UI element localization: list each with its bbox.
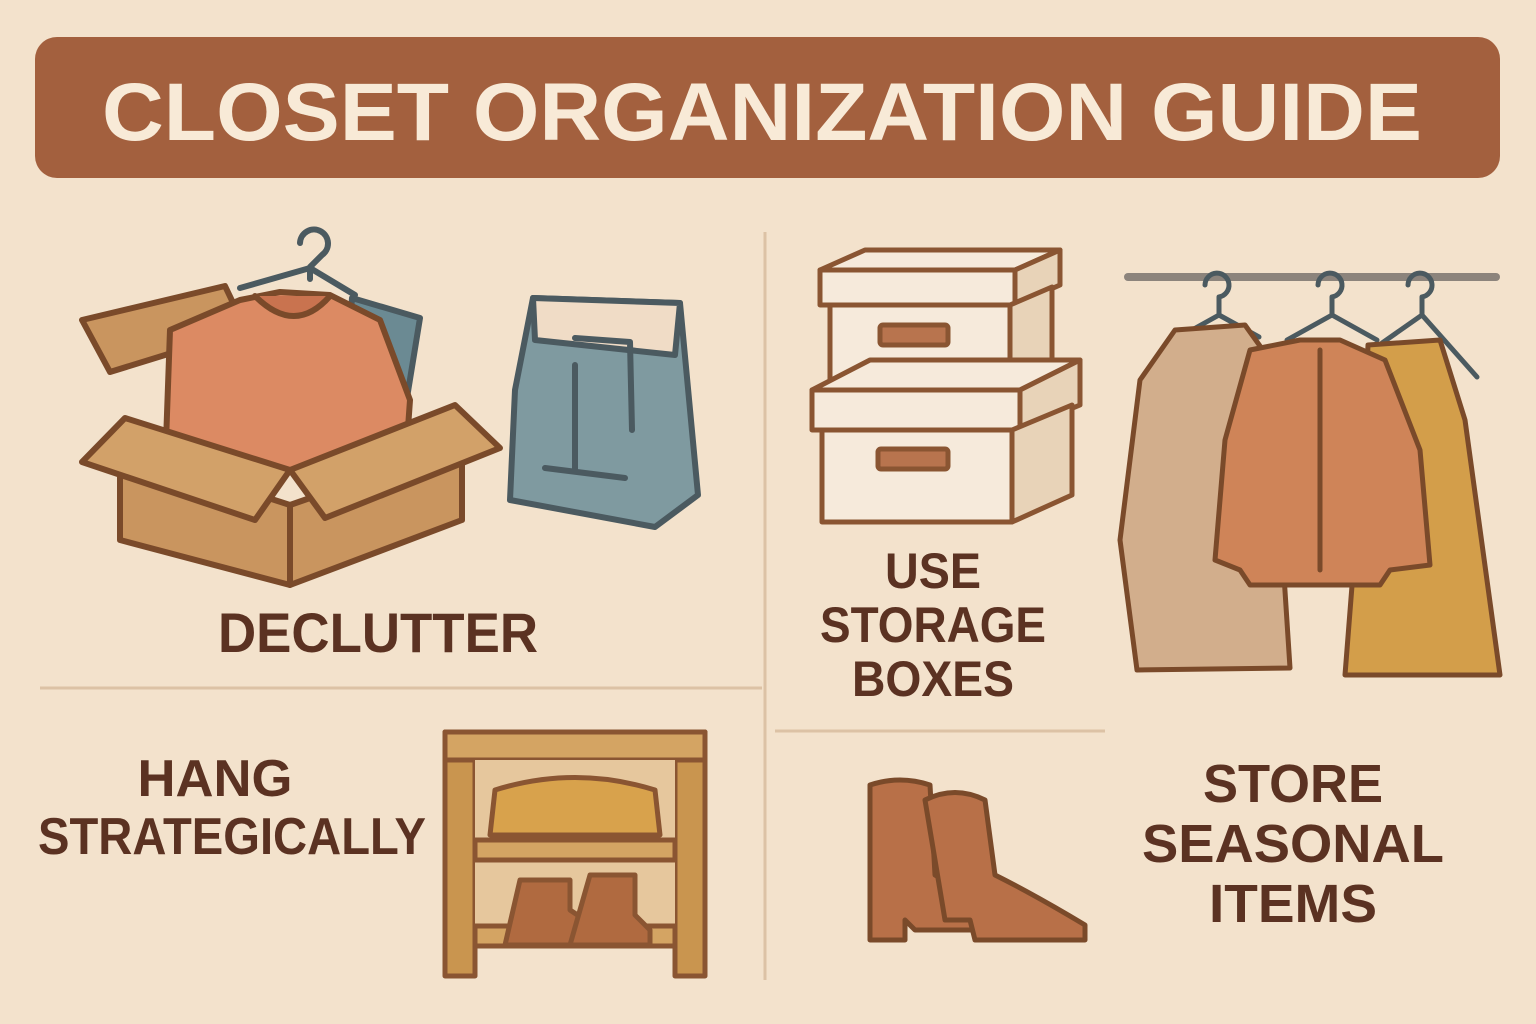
label: hang strategically: STRATEGICALLY (38, 808, 426, 866)
label: use storage boxes: BOXES (852, 651, 1014, 707)
panel: declutter (82, 230, 698, 664)
panel: store seasonal items (870, 754, 1444, 940)
label: use storage boxes (820, 543, 1046, 707)
panel: seasonal clothes on rail (1120, 273, 1500, 675)
icon: shelf with sweater and boots (445, 732, 705, 976)
icon: box with clothes (82, 230, 500, 585)
title: CLOSET ORGANIZATION GUIDE (102, 67, 1422, 158)
icon: coat (1120, 325, 1290, 670)
label: store seasonal items: ITEMS (1209, 874, 1377, 934)
label: store seasonal items (1142, 754, 1444, 934)
icon: dress (1345, 340, 1500, 675)
label: store seasonal items: STORE (1203, 754, 1383, 814)
title (35, 37, 1500, 178)
label: store seasonal items: SEASONAL (1142, 814, 1444, 874)
icon: jacket (1215, 340, 1430, 585)
label: hang strategically: HANG (138, 750, 292, 808)
icon: ankle boots (870, 780, 1085, 940)
label: declutter: DECLUTTER (218, 601, 538, 664)
label: hang strategically (38, 750, 426, 866)
icon: folded jeans (510, 298, 698, 527)
panel: hang strategically (38, 732, 705, 976)
panel: storage boxes (812, 250, 1080, 707)
label: use storage boxes: STORAGE (820, 597, 1046, 653)
label: use storage boxes: USE (885, 543, 981, 599)
icon: stacked boxes (812, 250, 1080, 522)
